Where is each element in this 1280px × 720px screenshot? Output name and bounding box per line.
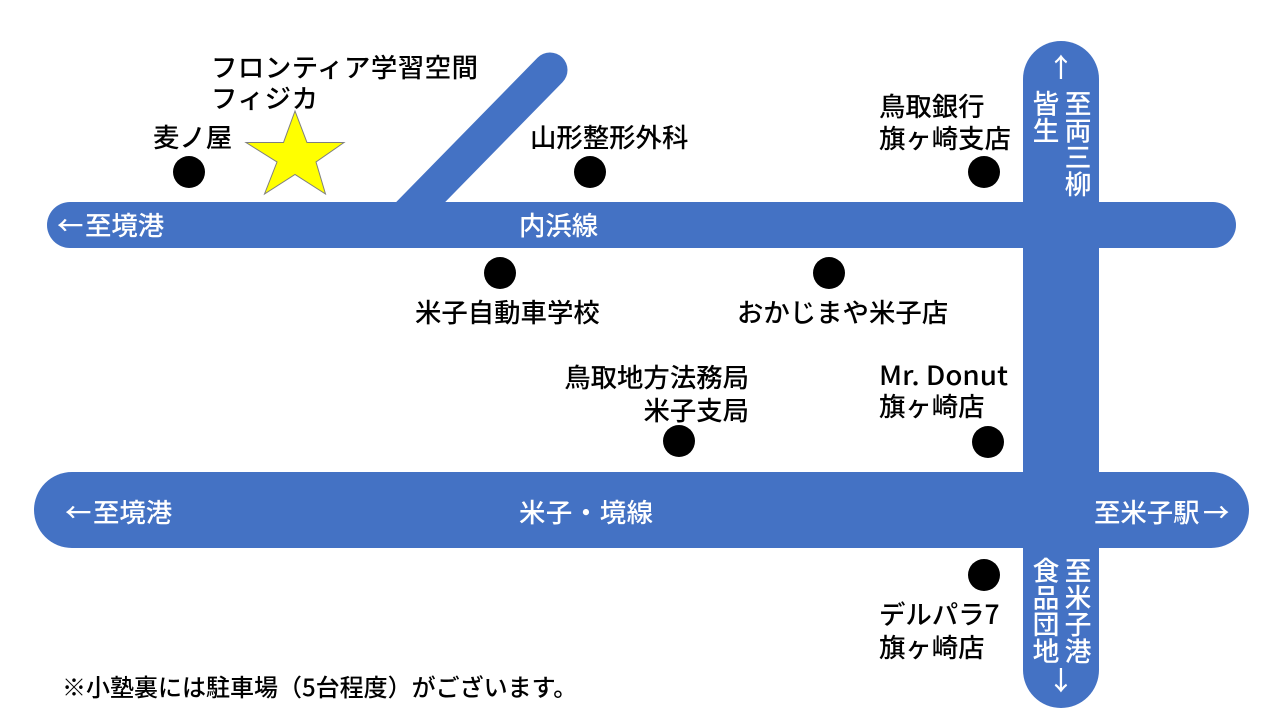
- road label: south direction: [1026, 557, 1098, 698]
- marker: Yamagata clinic: [574, 156, 606, 188]
- marker: Mr. Donut: [972, 426, 1004, 458]
- label: Mr. Donut: [879, 354, 1009, 424]
- marker: legal affairs bureau: [663, 425, 695, 457]
- label: Tottori Bank: 旗ヶ崎支店: [879, 117, 1011, 156]
- road label: south direction: ↓: [1048, 659, 1074, 698]
- label: Delupara 7: デルパラ7: [879, 593, 1000, 632]
- label: Mr. Donut: 旗ヶ崎店: [879, 385, 985, 424]
- marker: Tottori Bank: [968, 156, 1000, 188]
- road label: Uchihama line: 内浜線: [519, 204, 598, 243]
- label: Delupara 7: [879, 593, 1000, 665]
- marker: Okajimaya: [813, 257, 845, 289]
- road: Yonago-Sakai line: [34, 472, 1249, 548]
- label: legal affairs bureau: 鳥取地方法務局: [564, 356, 749, 395]
- marker: Muginoya: [173, 156, 205, 188]
- label: school name: フィジカ: [211, 77, 318, 116]
- road label: to Sakaiminato, lower: 至境港: [93, 491, 172, 530]
- label: driving school: 米子自動車学校: [415, 291, 600, 330]
- road: Uchihama line: [47, 202, 1236, 248]
- label: Delupara 7: 旗ヶ崎店: [879, 626, 985, 665]
- label: Mr. Donut: Mr. Donut: [879, 354, 1009, 393]
- label: Tottori Bank: 鳥取銀行: [879, 85, 985, 124]
- icon: star marking the school: [246, 111, 344, 194]
- road label: to Yonago Station: →: [1203, 491, 1229, 530]
- label: Okajimaya: おかじまや米子店: [737, 291, 948, 330]
- road label: south direction: 至米子港: [1058, 557, 1098, 664]
- road label: north direction: [1026, 46, 1098, 197]
- road label: north direction: 至両三柳: [1058, 90, 1098, 197]
- label: Tottori Bank: [879, 85, 1011, 156]
- road label: to Sakaiminato, lower: ←: [65, 491, 91, 530]
- label: school name: [211, 46, 478, 116]
- label: school name: フロンティア学習空間: [211, 46, 478, 85]
- road label: to Sakaiminato, upper: ←: [57, 204, 83, 243]
- label: legal affairs bureau: [564, 356, 749, 428]
- road label: to Yonago Station: 至米子駅: [1094, 491, 1200, 530]
- road label: north direction: 皆生: [1026, 90, 1066, 144]
- road: diagonal side street: [408, 70, 550, 215]
- note: parking: ※小塾裏には駐車場（5台程度）がございます。: [62, 668, 577, 703]
- label: legal affairs bureau: 米子支局: [643, 389, 749, 428]
- road label: south direction: 食品団地: [1026, 557, 1066, 664]
- road label: to Sakaiminato, upper: 至境港: [85, 204, 164, 243]
- label: Muginoya: 麦ノ屋: [153, 116, 232, 155]
- road label: north direction: ↑: [1048, 46, 1074, 85]
- road: vertical north-south road: [1023, 41, 1099, 708]
- marker: Delupara 7: [968, 559, 1000, 591]
- marker: driving school: [484, 257, 516, 289]
- label: Yamagata clinic: 山形整形外科: [530, 116, 688, 155]
- road label: Yonago-Sakai line: 米子・境線: [519, 491, 653, 530]
